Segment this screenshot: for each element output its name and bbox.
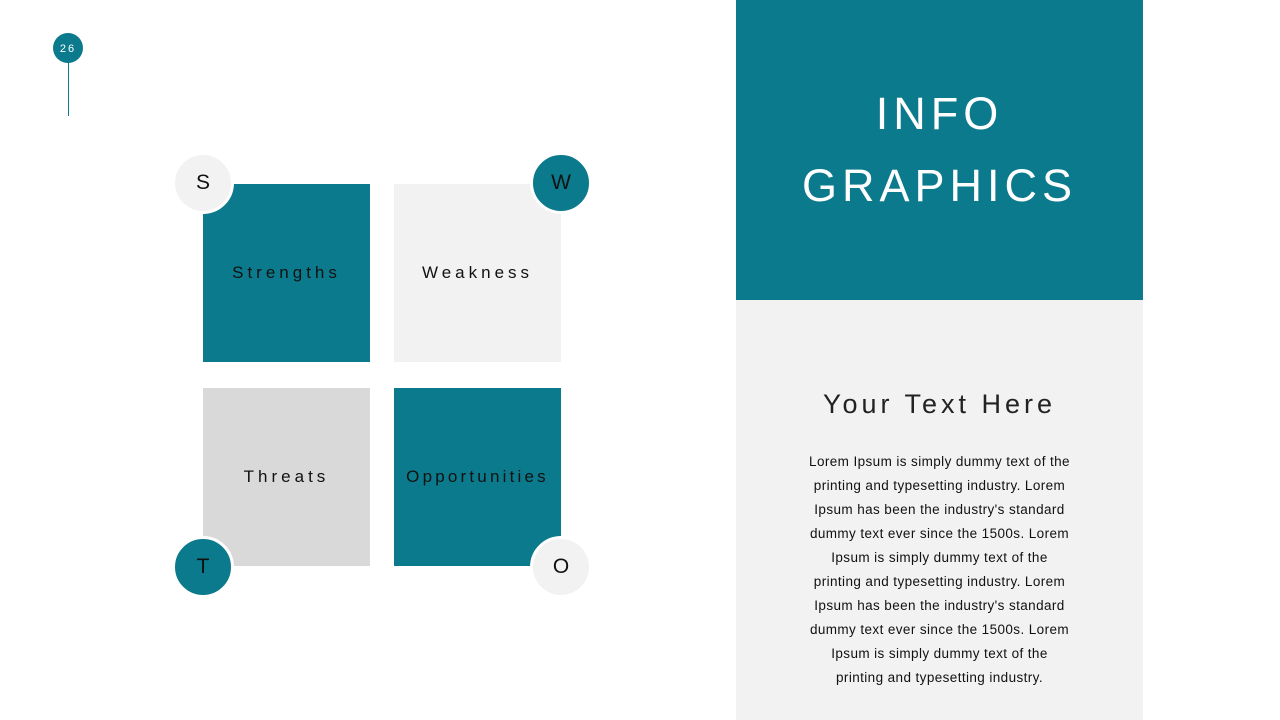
- circle S: [172, 152, 234, 214]
- circle W: W: [551, 171, 571, 194]
- box: strengths: Strengths: [232, 263, 341, 282]
- body text: printing and typesetting industry. Lorem: [814, 574, 1065, 589]
- circle T: T: [197, 555, 209, 578]
- box: threats: [203, 388, 370, 566]
- title: INFO: [876, 88, 1003, 139]
- subheading: Your Text Here: [823, 389, 1056, 419]
- title: [802, 88, 1077, 211]
- SWOT grid: [175, 155, 589, 595]
- body text: Ipsum has been the industry's standard: [814, 598, 1065, 613]
- box: strengths: [203, 184, 370, 362]
- box: weakness: Weakness: [422, 263, 533, 282]
- body text: Ipsum is simply dummy text of the: [831, 550, 1048, 565]
- body text: Ipsum has been the industry's standard: [814, 502, 1065, 517]
- body text: printing and typesetting industry.: [836, 670, 1043, 685]
- body text: printing and typesetting industry. Lorem: [814, 478, 1065, 493]
- circle S: S: [196, 171, 210, 194]
- box: threats: Threats: [244, 467, 329, 486]
- circle O: [530, 536, 592, 598]
- right panel text block: [736, 300, 1143, 720]
- box: opportunities: Opportunities: [406, 467, 549, 486]
- title: GRAPHICS: [802, 160, 1077, 211]
- circle W: [530, 152, 592, 214]
- body text: Lorem Ipsum is simply dummy text of the: [809, 454, 1070, 469]
- body text: [809, 454, 1070, 685]
- circle O: O: [553, 555, 569, 578]
- right panel title block: [736, 0, 1143, 300]
- box: weakness: [394, 184, 561, 362]
- body text: Ipsum is simply dummy text of the: [831, 646, 1048, 661]
- page number badge: 26: [60, 43, 76, 55]
- body text: dummy text ever since the 1500s. Lorem: [810, 622, 1069, 637]
- box: opportunities: [394, 388, 561, 566]
- body text: dummy text ever since the 1500s. Lorem: [810, 526, 1069, 541]
- circle T: [172, 536, 234, 598]
